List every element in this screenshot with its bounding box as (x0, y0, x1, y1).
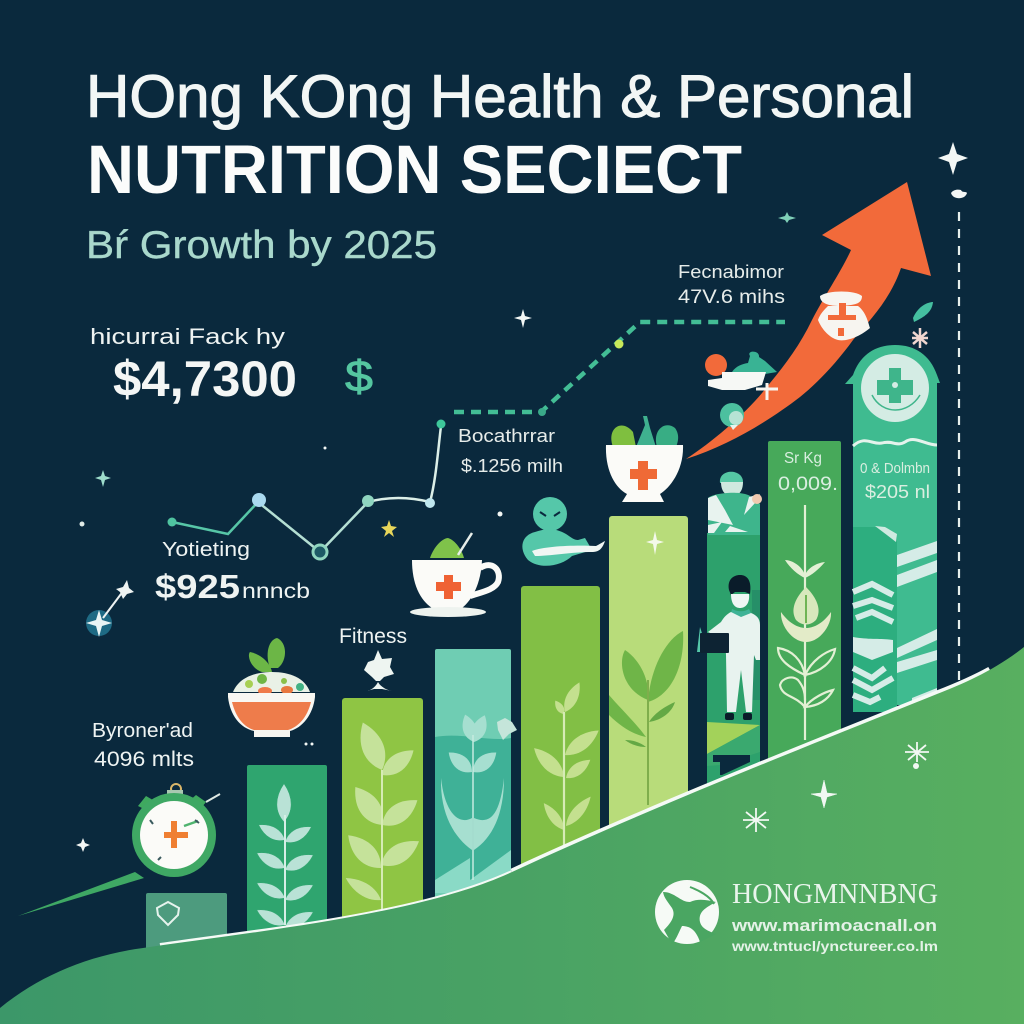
icon: dish with orange ball (705, 352, 778, 400)
icon: teal person (522, 497, 605, 566)
label: Byroner'ad: Byroner'ad (92, 720, 193, 742)
bar 4 (435, 649, 511, 899)
label: Byroner'ad: 4096 mlts (94, 748, 194, 771)
logo mark (655, 880, 719, 944)
dashed trend line (454, 322, 785, 416)
label: Yotieting: nnncb (242, 580, 310, 603)
label: Yotieting (155, 539, 310, 605)
green spike (18, 872, 144, 916)
label: Bocathrrar (458, 426, 563, 476)
bar 8 (768, 441, 841, 761)
icon: person with laptop (697, 575, 760, 720)
bar 5 (521, 586, 603, 871)
white ridge line (160, 670, 990, 945)
vertical dashed guide (951, 190, 967, 680)
sparkles on background (76, 142, 968, 852)
logo (655, 878, 938, 954)
icon: feather and asterisk (912, 302, 933, 348)
hill (0, 647, 1024, 1024)
icon: teacup (410, 533, 499, 617)
icon: white bowl with orange cross (606, 416, 683, 502)
title line 1: HOng KOng Health & Personal (86, 63, 914, 130)
label: Yotieting: Yotieting (162, 539, 250, 561)
logo url 1: www.marimoacnall.on (731, 916, 937, 935)
bar 2 (247, 765, 327, 945)
bar 7 with person (697, 472, 762, 785)
icon: teal figure (708, 472, 762, 535)
bar 9 label (860, 460, 930, 502)
icon: green dollar: $ (345, 352, 373, 401)
icon: stopwatch (132, 784, 220, 877)
bar 9 label: $205 nl (865, 482, 930, 502)
bars (146, 345, 940, 963)
logo url 2: www.tntucl/ynctureer.co.lm (731, 938, 938, 954)
logo name: HONGMNNBNG (732, 878, 938, 910)
title line 2: NUTRITION SECIECT (87, 131, 742, 208)
stat label: hicurrai Fack hy (90, 324, 285, 349)
label: Fecnabimor: Fecnabimor (678, 262, 784, 282)
label: Bocathrrar: Bocathrrar (458, 426, 555, 446)
icon: teal mint ball (720, 403, 744, 430)
line chart (168, 420, 446, 559)
green ground (0, 647, 1024, 1024)
growth arrow (686, 182, 931, 459)
platform (707, 722, 760, 775)
bar 9 label: 0 & Dolmbn (860, 460, 930, 477)
label: Yotieting: $925 (155, 568, 240, 605)
icon: salad bowl (228, 638, 315, 737)
bar 8 label: Sr Kg (784, 450, 822, 467)
bar 9 hospital tower (845, 345, 940, 712)
label: Fecnabimor: 47V.6 mihs (678, 287, 785, 308)
label: Bocathrrar: $.1256 milh (461, 456, 563, 476)
icon: pot on arrow (818, 292, 870, 340)
icon: fitness tree (364, 650, 394, 691)
title (86, 63, 914, 208)
bar 3 (341, 698, 424, 923)
stat: headline value (90, 324, 373, 407)
bar 6 (609, 516, 688, 836)
label: Fitness: Fitness (339, 625, 407, 648)
bar 1 (146, 893, 227, 963)
bar 8 label (778, 450, 838, 495)
label: Byroner'ad (92, 720, 194, 771)
sparkles on hill (743, 742, 929, 832)
stat value: $4,7300 (113, 351, 297, 407)
label: Fecnabimor (678, 262, 785, 308)
subtitle: Bŕ Growth by 2025 (86, 224, 437, 267)
bar 8 label: 0,009. (778, 474, 838, 495)
comet star (86, 580, 134, 637)
